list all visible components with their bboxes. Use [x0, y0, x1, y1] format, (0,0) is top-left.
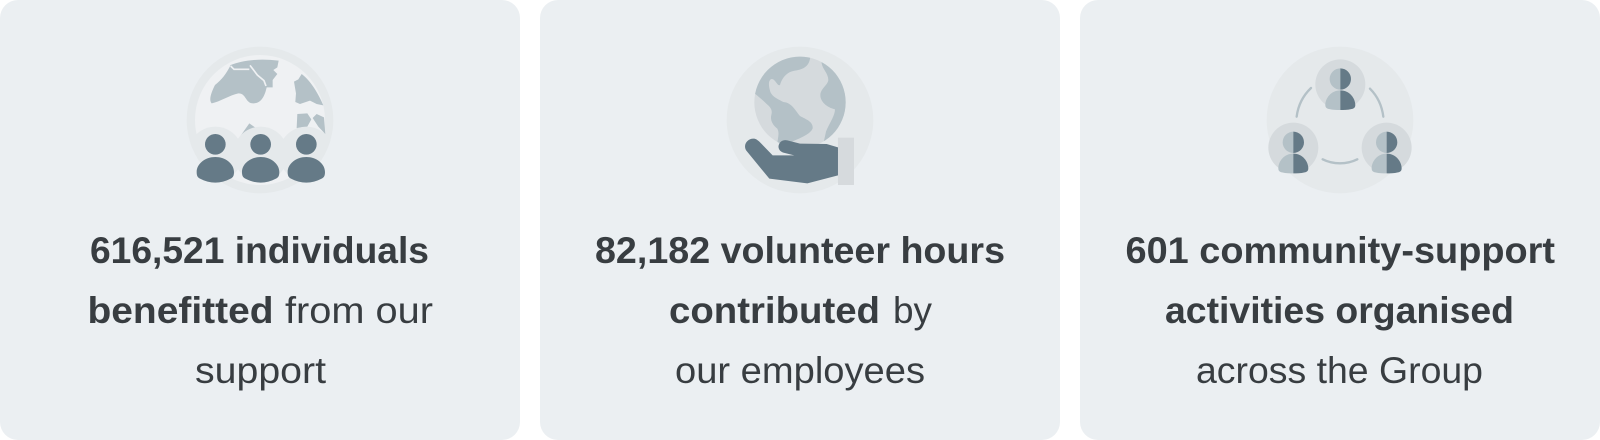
text: volunteer hours: 82,182 volunteer hours — [595, 230, 1005, 271]
text: community activities: activities organised — [1165, 290, 1514, 331]
text: individuals benefitted — [88, 230, 433, 391]
text: community activities: across the Group — [1196, 350, 1483, 391]
text: volunteer hours — [595, 230, 1005, 391]
text: community activities: 601 community-support — [1126, 230, 1555, 271]
text: individuals benefitted: benefitted — [88, 290, 274, 331]
text: individuals benefitted: support — [195, 350, 327, 391]
icon: person right — [288, 134, 325, 183]
icon: three connected people — [1267, 47, 1413, 193]
icon: person centre — [242, 134, 279, 183]
panel: community activities — [1080, 0, 1600, 440]
text: volunteer hours: our employees — [675, 350, 925, 391]
text: community activities — [1126, 230, 1555, 391]
text: individuals benefitted: 616,521 individuals — [90, 230, 429, 271]
panel: individuals benefitted — [0, 0, 520, 440]
text: volunteer hours: contributed — [669, 290, 880, 331]
panel: volunteer hours — [540, 0, 1060, 440]
icon: hand holding globe — [745, 56, 854, 185]
icon: globe with three people — [196, 60, 326, 183]
text: volunteer hours: by — [893, 290, 932, 331]
text: individuals benefitted: from our — [285, 290, 433, 331]
icon: person left — [197, 134, 234, 183]
